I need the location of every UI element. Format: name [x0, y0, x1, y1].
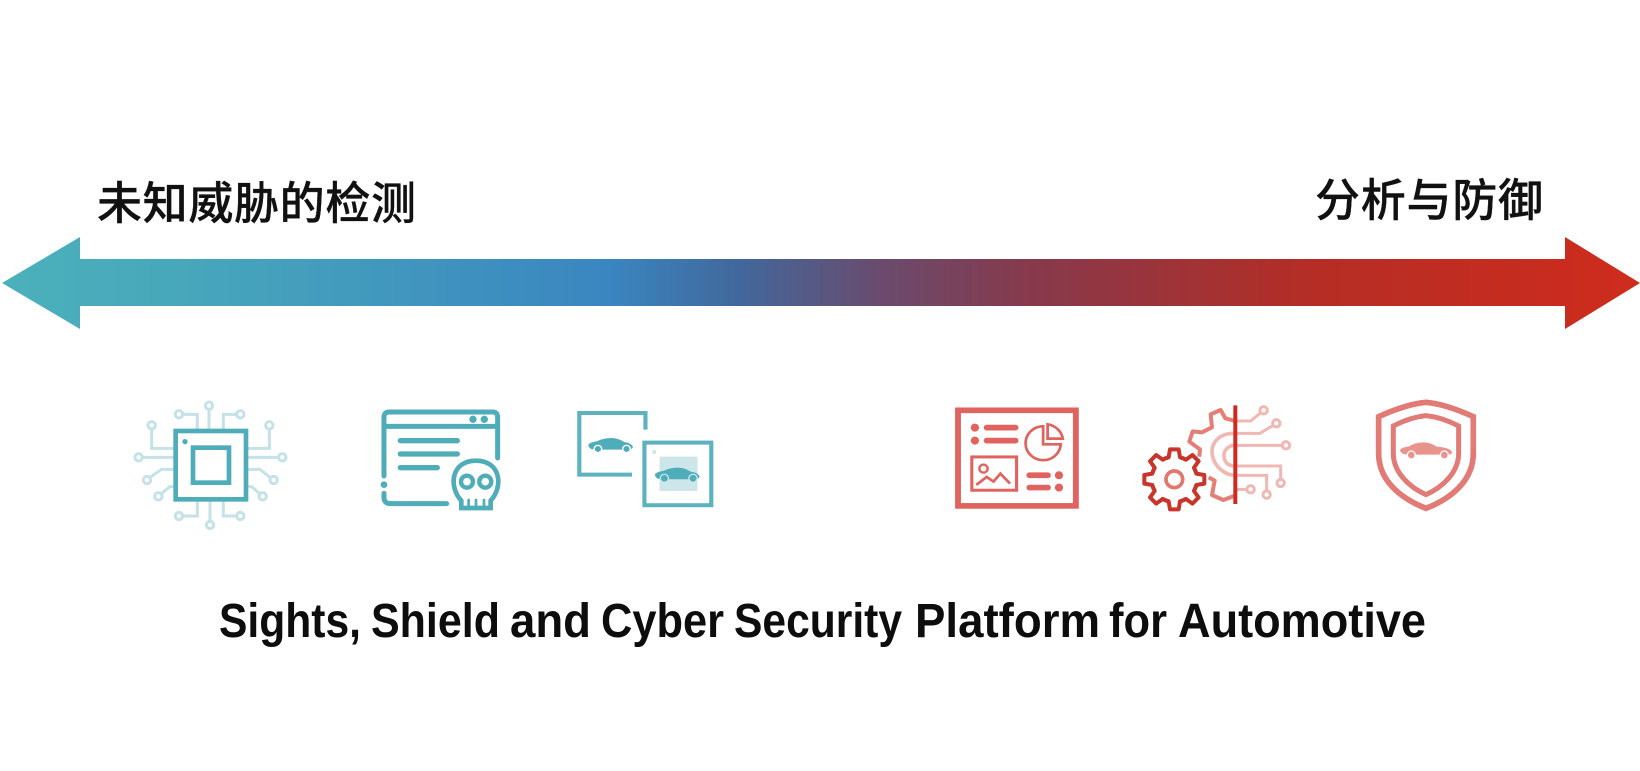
icon: browser window with skull — [381, 412, 498, 508]
car small — [588, 438, 633, 450]
title: platform name: Shield — [371, 595, 500, 648]
double-headed gradient arrow — [2, 237, 1640, 329]
heading: analysis and defense: 分析与防御 — [1315, 175, 1543, 226]
title: platform name: Platform — [915, 595, 1100, 648]
title: platform name — [219, 595, 1426, 648]
icon: circuit chip — [135, 402, 286, 529]
heading: unknown threat detection: 未知威胁的检测 — [97, 178, 416, 229]
title: platform name: and — [510, 595, 591, 648]
title: platform name: Sights, — [219, 595, 361, 648]
title: platform name: Security — [734, 595, 902, 648]
icon: dashboard panel — [958, 410, 1076, 506]
title: platform name: for — [1109, 595, 1167, 648]
icon: car shield — [1379, 402, 1473, 508]
icon: gears and circuit — [1144, 405, 1290, 509]
title: platform name: Automotive — [1178, 595, 1426, 648]
icon: car image comparison — [579, 413, 711, 505]
car large — [655, 468, 700, 479]
title: platform name: Cyber — [601, 595, 724, 648]
